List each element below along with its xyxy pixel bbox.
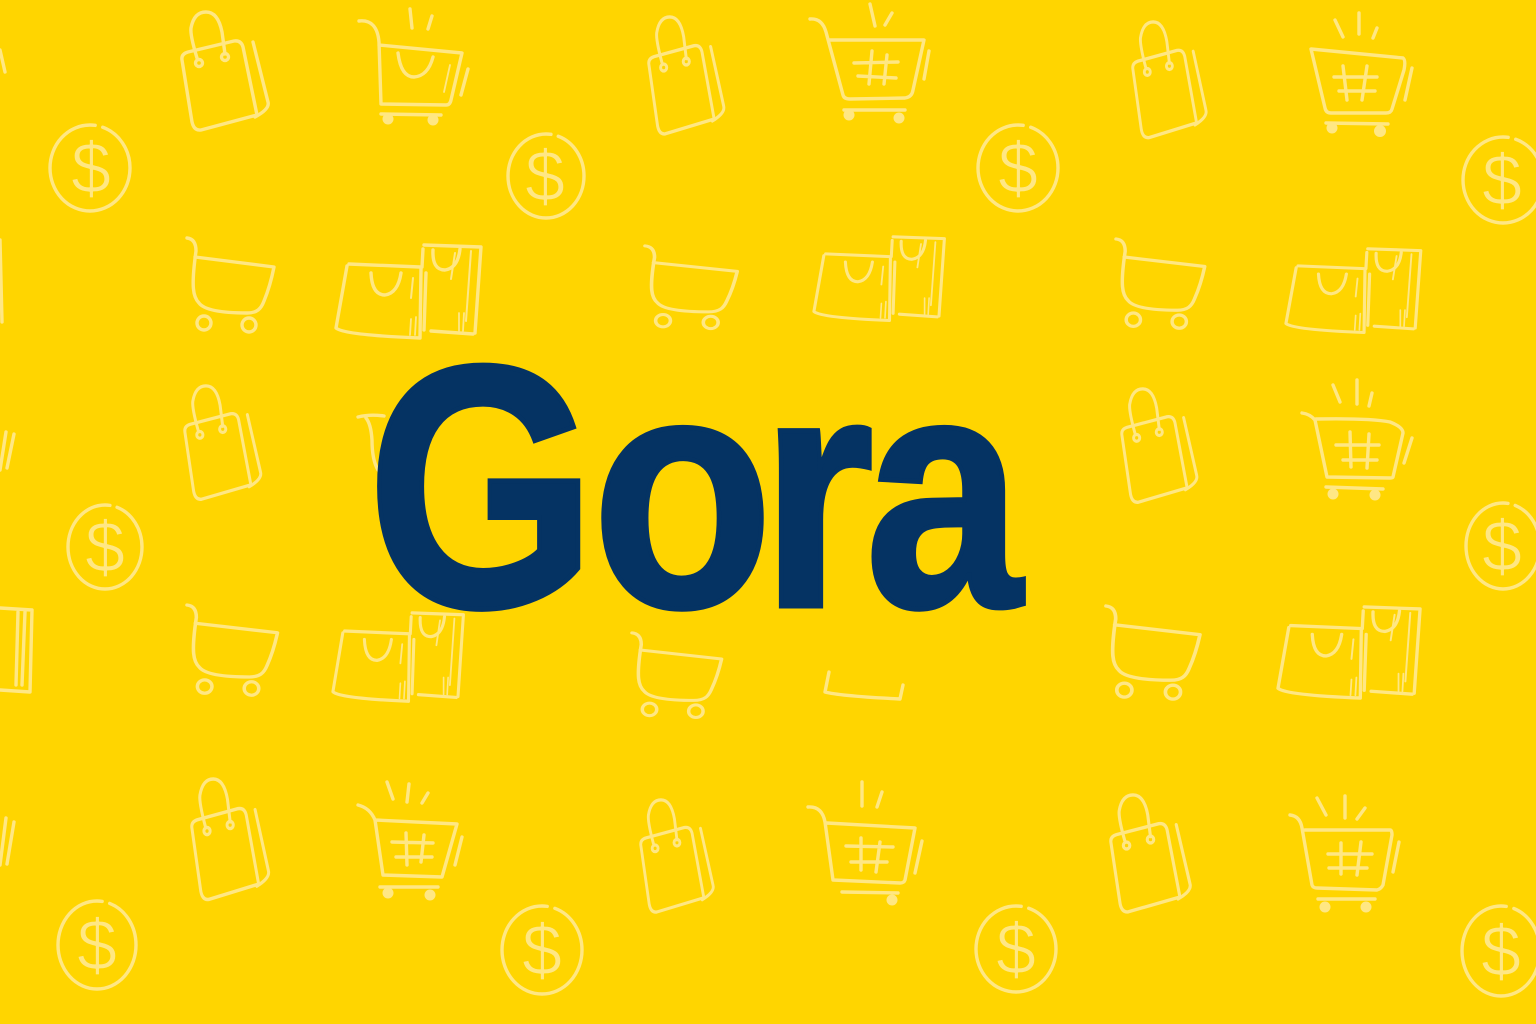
- icon: shopping bag: [641, 800, 713, 912]
- icon: double bags: [814, 237, 944, 320]
- icon: cart with hash: [358, 782, 462, 887]
- icon: dollar coin: $: [85, 508, 125, 588]
- icon: edge fragments at left: [0, 50, 14, 865]
- icon: cart: [645, 246, 737, 329]
- icon: dollar coin: $: [1481, 912, 1521, 992]
- icon: cart wheels: [844, 110, 904, 124]
- icon: dollar coin: [502, 906, 582, 994]
- icon: cart: [1106, 606, 1200, 699]
- icon: cart wheels: [1320, 902, 1372, 912]
- icon: dollar coin: $: [998, 129, 1038, 209]
- icon: dollar coin: [1466, 503, 1536, 589]
- icon: dollar coin: [976, 906, 1056, 992]
- icon: dollar coin: $: [1482, 507, 1522, 587]
- icon: basket with hash: [1311, 13, 1412, 124]
- icon: dollar coin: $: [525, 137, 565, 217]
- icon: double bags: [1286, 249, 1421, 332]
- title: Gora logo: r: [761, 307, 874, 677]
- icon: cart with hash: [1290, 796, 1399, 899]
- icon: dollar coin: $: [71, 129, 111, 209]
- icon: shopping bag: [649, 17, 724, 134]
- title: Gora logo: a: [865, 307, 1024, 677]
- icon: shopping bag: [1111, 795, 1190, 912]
- icon: dollar coin: [50, 125, 130, 211]
- icon: double bag fragment at left edge: [0, 608, 32, 692]
- title: Gora logo: G: [367, 294, 596, 679]
- icon: cart with hash: [810, 4, 929, 110]
- icon: shopping bag: [192, 779, 269, 900]
- icon: shopping bag: [182, 12, 268, 130]
- icon: dollar coin: $: [996, 910, 1036, 990]
- icon: cart with hash: [808, 782, 922, 893]
- icon: cart with bag: [359, 9, 468, 126]
- icon: cart: [187, 238, 274, 332]
- icon: cart fragment behind logo: [358, 415, 384, 470]
- icon: basket fragment: [825, 672, 903, 699]
- icon: cart: [187, 605, 277, 695]
- icon: cart: [632, 633, 722, 718]
- icon: cart wheels: [382, 888, 436, 900]
- icon: dollar coin: $: [77, 906, 117, 986]
- icon: dollar coin: [68, 505, 142, 589]
- icon: dollar coin: [1463, 137, 1536, 223]
- icon: double bags: [1278, 607, 1420, 698]
- icon: double bags: [336, 245, 481, 338]
- icon: cart wheels: [1328, 488, 1380, 500]
- icon: dollar coin: [1462, 906, 1536, 996]
- icon: dollar coin: [508, 134, 584, 218]
- icon: cart: [1116, 239, 1205, 328]
- icon: double bags: [333, 613, 463, 701]
- title: Gora logo: o: [592, 307, 773, 677]
- icon: basket wheels: [1326, 122, 1386, 137]
- icon: shopping bag: [185, 386, 261, 499]
- icon: dollar coin: [978, 125, 1058, 211]
- icon: dollar coin: $: [522, 911, 562, 991]
- icon: shopping bag: [1122, 389, 1197, 502]
- icon: cart with hash: [1302, 380, 1412, 489]
- icon: shopping bag: [1133, 22, 1206, 138]
- icon: dollar coin: [58, 901, 136, 989]
- icon: dollar coin: $: [1482, 141, 1522, 221]
- icon: cart wheel: [886, 894, 898, 906]
